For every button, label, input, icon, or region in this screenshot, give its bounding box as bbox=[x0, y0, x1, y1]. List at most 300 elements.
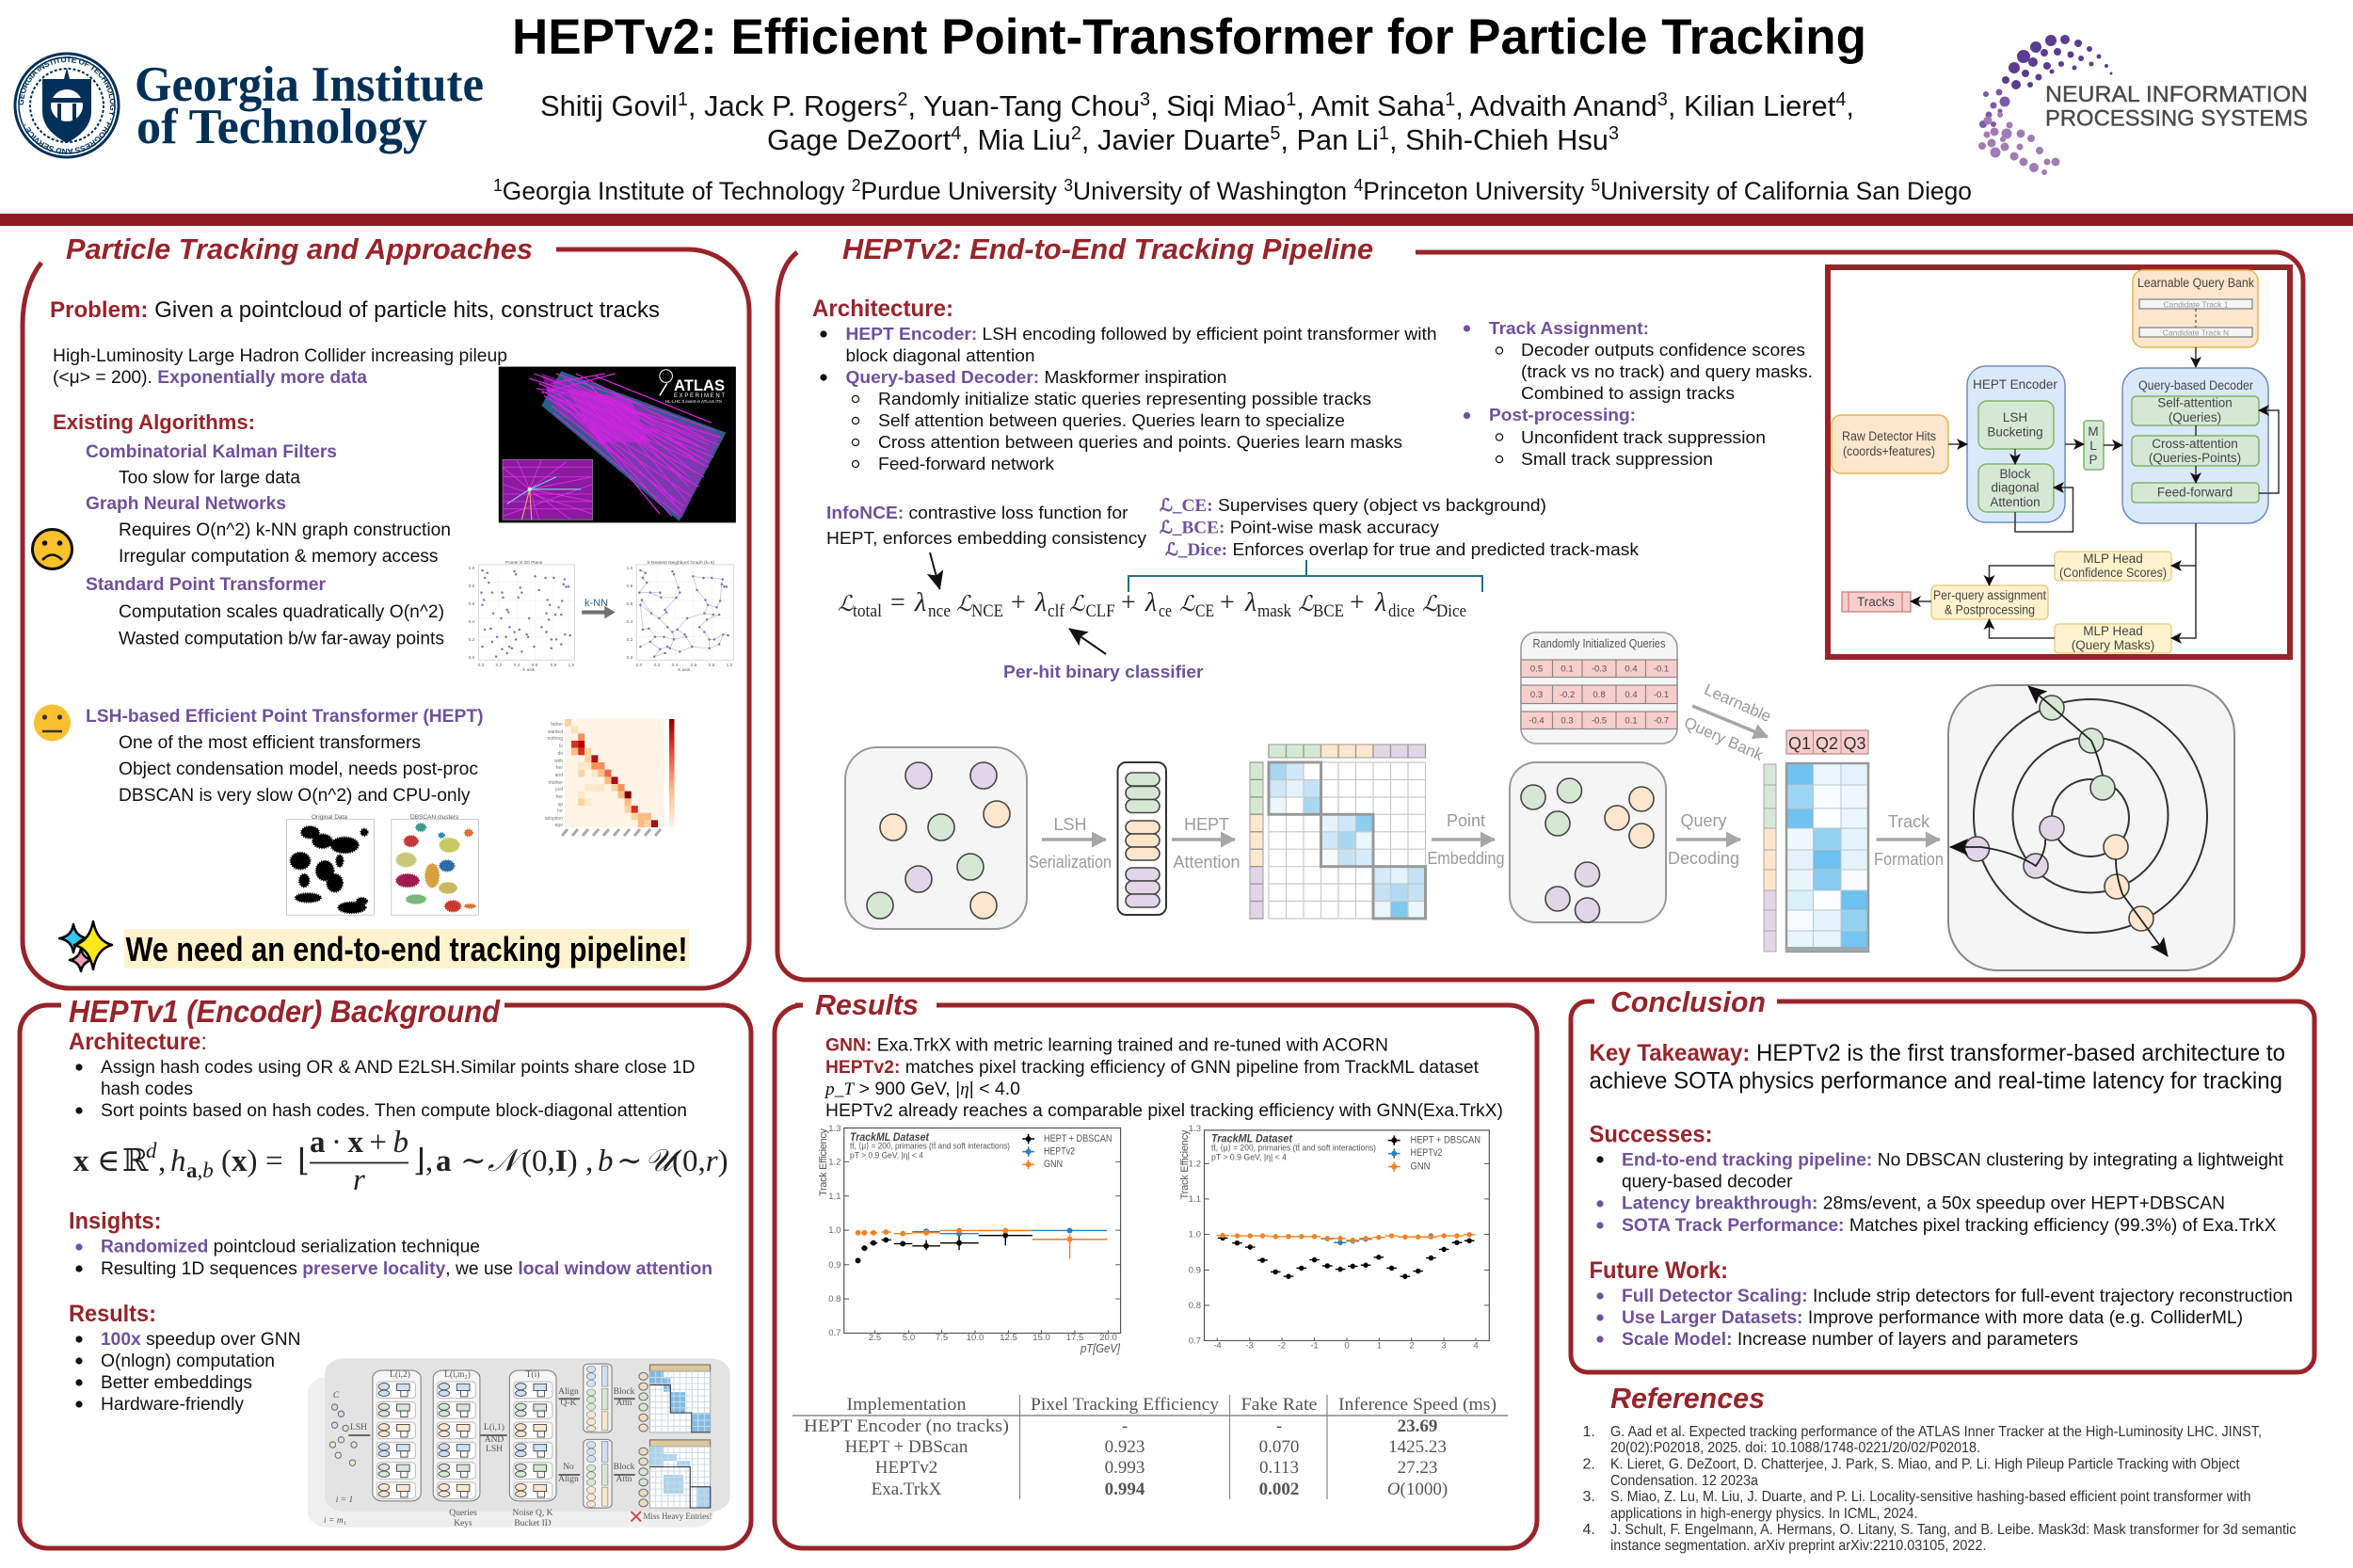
block: tracks bbox=[1842, 592, 1911, 612]
arrow: track formation: Formation bbox=[1874, 850, 1944, 869]
text block: track assignment and post-processing: Combined to assign tracks bbox=[1521, 383, 1735, 403]
panel: End-to-End Tracking Pipeline bbox=[777, 232, 2303, 980]
table: benchmark comparison: Exa.TrkX bbox=[872, 1480, 942, 1499]
diagram: reconstructed tracks bbox=[1948, 685, 2234, 970]
equation: total loss: + bbox=[1121, 588, 1136, 617]
equation: LSH hash function: ⌊ bbox=[297, 1144, 310, 1178]
arrow: LSH serialization: Serialization bbox=[1029, 853, 1112, 872]
chart: efficiency vs pT: 2.5 bbox=[869, 1333, 881, 1343]
title: HEPTv2: Efficient Point-Transformer for Particle Tracking bbox=[512, 9, 1866, 65]
chart: efficiency vs eta: 3 bbox=[1441, 1340, 1447, 1352]
text block: architecture bbox=[69, 1029, 695, 1121]
chart: block-diagonal attention matrix bbox=[1250, 744, 1425, 919]
diagram: HEPT encoder overview: Block bbox=[614, 1463, 635, 1472]
chart: efficiency vs pT: HEPT + DBSCAN bbox=[1044, 1133, 1112, 1144]
chart: k-NN scatter plots: X axis bbox=[522, 667, 536, 673]
chart: k-NN scatter plots: k-Nearest Neighbors Graph (k=5) bbox=[648, 560, 714, 566]
chart: efficiency vs eta: 0.9 bbox=[1189, 1265, 1201, 1276]
block: MLP head masks: MLP Head bbox=[2083, 624, 2143, 638]
equation: LSH hash function: a,b bbox=[186, 1159, 214, 1182]
equation: total loss: ℒ bbox=[1069, 592, 1085, 616]
diagram: architecture flowchart bbox=[1828, 267, 2290, 657]
authors: 1 bbox=[678, 89, 688, 110]
block: HEPT encoder: diagonal bbox=[1991, 480, 2040, 495]
chart: k-NN scatter plots: 0.8 bbox=[709, 663, 715, 668]
equation: total loss: ce bbox=[1159, 601, 1172, 621]
block: query-based decoder: Cross-attention bbox=[2152, 437, 2238, 451]
arrow: HEPT attention: Attention bbox=[1173, 853, 1241, 872]
flowchart arrows bbox=[1911, 347, 2279, 638]
equation: total loss: NCE bbox=[971, 601, 1003, 621]
table: benchmark comparison: 0.002 bbox=[1259, 1480, 1299, 1499]
authors: 2 bbox=[1071, 123, 1081, 144]
chart: attention heatmap: for bbox=[557, 808, 563, 814]
chart: DBSCAN clusters bbox=[286, 814, 478, 915]
chart: query mask matrix: Q3 bbox=[1843, 734, 1866, 753]
table: benchmark comparison: HEPT + DBScan bbox=[845, 1437, 968, 1457]
text block: successes: query-based decoder bbox=[1622, 1173, 1793, 1192]
chart: k-NN scatter plots: 0.2 bbox=[654, 663, 661, 668]
logo wordmark: of Technology bbox=[136, 100, 427, 154]
equation: LSH hash function: h bbox=[170, 1144, 186, 1178]
text block: HEPT bbox=[86, 707, 484, 806]
diagram: HEPT encoder overview: L(i,1) bbox=[484, 1422, 504, 1432]
text block: track assignment and post-processing bbox=[1464, 318, 1813, 469]
table: benchmark comparison: 27.23 bbox=[1398, 1458, 1437, 1478]
diagram: HEPT encoder overview: No bbox=[563, 1463, 574, 1472]
chart: k-NN scatter plots: 1.0 bbox=[627, 566, 633, 571]
diagram: HEPT encoder overview: C bbox=[333, 1391, 340, 1400]
arrow: HEPT attention bbox=[1172, 815, 1241, 872]
arrow: LSH serialization bbox=[1029, 815, 1112, 872]
block: per-query assignment: & Postprocessing bbox=[1945, 602, 2035, 617]
table: benchmark comparison bbox=[792, 1395, 1508, 1499]
block: raw detector hits: Raw Detector Hits bbox=[1842, 429, 1936, 443]
chart: attention heatmap: nothing bbox=[548, 736, 563, 742]
authors: , Jack P. Rogers bbox=[688, 89, 897, 122]
diagram: HEPT encoder overview: Attn bbox=[616, 1475, 632, 1484]
equation: total loss: CE bbox=[1195, 601, 1214, 621]
text block: results: Results: bbox=[69, 1301, 156, 1327]
equation: LSH hash function: ∼ bbox=[460, 1144, 487, 1178]
text block: track assignment and post-processing: Track Assignment: bbox=[1489, 318, 1649, 338]
chart: k-NN scatter plots: Points in 2D Plane bbox=[505, 560, 543, 566]
chart: attention heatmap: her bbox=[556, 765, 563, 771]
chart: efficiency vs eta: tt̄, ⟨μ⟩ = 200, primaries (tt̄ and soft interactions) bbox=[1211, 1143, 1376, 1154]
equation: total loss: + bbox=[1220, 588, 1235, 617]
diagram: HEPT encoder overview: Queries bbox=[449, 1509, 477, 1518]
block: per-query assignment: Per-query assignment bbox=[1933, 588, 2046, 602]
diagram: randomly initialized queries: 0.8 bbox=[1593, 690, 1606, 700]
heading: Conclusion bbox=[1610, 985, 1766, 1018]
chart: efficiency vs eta: -3 bbox=[1245, 1340, 1254, 1352]
authors: , Shih-Chieh Hsu bbox=[1389, 123, 1609, 156]
block: learnable query bank: Candidate Track N bbox=[2163, 328, 2229, 337]
diagram: HEPT encoder overview: Noise Q, K bbox=[512, 1509, 553, 1518]
chart: k-NN scatter plots: 1.0 bbox=[469, 566, 475, 571]
chart: efficiency vs pT: tt̄, ⟨μ⟩ = 200, primaries (tt̄ and soft interactions) bbox=[850, 1141, 1010, 1152]
affiliations: Princeton University bbox=[1363, 177, 1591, 205]
text block: successes: End-to-end tracking pipeline: No DBSCAN clustering by integrating a lightweight bbox=[1622, 1150, 2284, 1171]
authors: , Siqi Miao bbox=[1150, 89, 1286, 122]
heading: HEPTv1 (Encoder) Background bbox=[69, 994, 501, 1029]
equation: total loss: total bbox=[853, 601, 882, 621]
text block: future work: Future Work: bbox=[1589, 1257, 1728, 1284]
table: benchmark comparison: 0.113 bbox=[1259, 1458, 1299, 1478]
bracket: mask losses bbox=[1128, 560, 1482, 592]
equation: LSH hash function: b bbox=[598, 1144, 614, 1178]
diagram: serialized sequence bbox=[1118, 762, 1166, 915]
diagram: HEPT encoder overview: Block bbox=[614, 1387, 635, 1397]
diagram: randomly initialized queries: 0.3 bbox=[1530, 690, 1543, 700]
logo wordmark: Georgia Institute bbox=[135, 57, 484, 112]
text block: architecture: Assign hash codes using OR & AND E2LSH.Similar points share close 1D bbox=[101, 1058, 695, 1078]
chart: efficiency vs pT: 7.5 bbox=[936, 1333, 948, 1343]
diagram: randomly initialized queries: -0.1 bbox=[1654, 664, 1669, 674]
text block: track assignment and post-processing: Post-processing: bbox=[1489, 405, 1636, 424]
authors: , Kilian Lieret bbox=[1668, 89, 1836, 122]
text block: architecture list: Randomly initialize static queries representing possible tracks bbox=[878, 389, 1371, 408]
text block: existing algorithms: Wasted computation b/w far-away points bbox=[119, 629, 444, 649]
panel border bbox=[23, 249, 749, 988]
equation: LSH hash function: , bbox=[585, 1144, 593, 1178]
text block: results summary: HEPTv2: matches pixel tracking efficiency of GNN pipeline from TrackML dataset bbox=[825, 1058, 1480, 1078]
text block: InfoNCE note bbox=[826, 503, 1147, 548]
chart: k-NN scatter plots bbox=[469, 560, 733, 673]
arrow: query decoding: Query bbox=[1680, 811, 1727, 830]
arrow: point embedding: Point bbox=[1447, 811, 1485, 830]
text block: key takeaway: Key Takeaway: HEPTv2 is the first transformer-based architecture to bbox=[1589, 1040, 2285, 1066]
chart: efficiency vs eta: -4 bbox=[1213, 1340, 1222, 1352]
diagram: randomly initialized queries: 0.1 bbox=[1625, 715, 1638, 727]
text block: existing algorithms: Combinatorial Kalman Filters bbox=[86, 442, 337, 462]
chart: k-NN scatter plots: 1.0 bbox=[568, 663, 575, 668]
text block: track assignment and post-processing: (track vs no track) and query masks. bbox=[1521, 361, 1813, 381]
table: benchmark comparison: 0.994 bbox=[1105, 1480, 1145, 1499]
text block: key takeaway bbox=[1589, 1040, 2285, 1094]
text block: reference list: 20(02):P02018, 2025. doi: 10.1088/1748-0221/20/02/P02018. bbox=[1610, 1440, 1980, 1456]
authors: Shitij Govil bbox=[540, 89, 678, 122]
chart: k-NN scatter plots: 0.2 bbox=[627, 637, 633, 643]
block: MLP head masks: (Query Masks) bbox=[2072, 638, 2154, 652]
chart: k-NN scatter plots: 0.6 bbox=[627, 601, 633, 607]
authors bbox=[540, 89, 1854, 156]
chart: efficiency vs eta: 1.0 bbox=[1189, 1229, 1201, 1240]
text block: results summary bbox=[824, 1035, 1503, 1121]
diagram: randomly initialized queries: -0.5 bbox=[1592, 715, 1607, 727]
arrow: to classifier term bbox=[1069, 629, 1106, 654]
equation: total loss: nce bbox=[928, 601, 951, 621]
diagram: HEPT encoder overview: Align bbox=[558, 1475, 579, 1484]
callout: need end-to-end pipeline: We need an end-to-end tracking pipeline! bbox=[126, 930, 687, 968]
text block: results bbox=[69, 1301, 301, 1415]
equation: total loss: clf bbox=[1048, 601, 1065, 621]
diagram: HEPT encoder overview: T(i) bbox=[526, 1369, 539, 1380]
block: tracks: Tracks bbox=[1857, 595, 1895, 609]
chart: attention heatmap: wanted bbox=[548, 729, 563, 735]
diagram: randomly initialized queries: 0.4 bbox=[1625, 664, 1638, 674]
arrow: track formation bbox=[1874, 812, 1944, 869]
equation: LSH hash function: , bbox=[158, 1144, 166, 1178]
equation: LSH hash function: 𝒩 bbox=[488, 1144, 526, 1178]
text block: HL-LHC: (<μ> = 200). Exponentially more data bbox=[53, 367, 367, 388]
block: HEPT encoder: Block bbox=[1999, 467, 2031, 481]
equation: total loss bbox=[838, 588, 1466, 621]
chart: efficiency vs eta: -1 bbox=[1310, 1340, 1319, 1352]
equation: LSH hash function: 𝒰 bbox=[645, 1144, 681, 1178]
ATLAS label bbox=[665, 377, 725, 404]
table: benchmark comparison: Inference Speed (ms) bbox=[1338, 1395, 1497, 1415]
chart: k-NN scatter plots: 0.6 bbox=[691, 663, 697, 668]
block: query-based decoder: Query-based Decoder bbox=[2138, 378, 2253, 392]
logo wordmark bbox=[2045, 82, 2308, 132]
arrow: query decoding bbox=[1668, 811, 1740, 868]
text block: insights: Randomized pointcloud serialization technique bbox=[101, 1237, 480, 1257]
panel: Particle Tracking and Approaches bbox=[23, 232, 749, 988]
chart: efficiency vs pT: 5.0 bbox=[903, 1333, 915, 1343]
chart: attention heatmap: with bbox=[554, 759, 563, 764]
chart: k-NN scatter plots: 0.8 bbox=[469, 584, 475, 589]
text block: architecture: Architecture: bbox=[69, 1029, 207, 1055]
chart: efficiency vs eta: 0.7 bbox=[1189, 1336, 1201, 1346]
table: benchmark comparison: - bbox=[1276, 1416, 1282, 1436]
table: benchmark comparison: 23.69 bbox=[1398, 1416, 1437, 1436]
arrow: to InfoNCE term bbox=[930, 552, 939, 589]
text block: reference list: J. Schult, F. Engelmann, A. Hermans, O. Litany, S. Tang, and B. Leibe. Mask3d: Mask transformer for 3d semantic bbox=[1610, 1522, 2297, 1538]
chart: k-NN scatter plots: 0.8 bbox=[551, 663, 557, 668]
chart: efficiency vs pT: 0.7 bbox=[828, 1328, 841, 1338]
diagram: HEPT encoder overview: Q-K bbox=[561, 1399, 577, 1408]
diagram: randomly initialized queries: -0.1 bbox=[1654, 690, 1669, 700]
chart: DBSCAN clusters: Original Data bbox=[312, 814, 347, 821]
icon: neural dots bbox=[1978, 35, 2112, 175]
equation: LSH hash function: ⌋, bbox=[413, 1144, 433, 1178]
chart: efficiency vs pT: 1.2 bbox=[828, 1158, 841, 1167]
text block: reference list bbox=[1583, 1424, 2297, 1554]
text block: loss terms: ℒ_Dice: Enforces overlap for true and predicted track-mask bbox=[1165, 539, 1640, 560]
text block: results summary: HEPTv2 already reaches a comparable pixel tracking efficiency with GNN(Exa.TrkX) bbox=[825, 1101, 1503, 1121]
equation: total loss: = bbox=[890, 588, 905, 617]
text block: existing algorithms: Graph Neural Networks bbox=[86, 494, 286, 514]
text block: results: 100x speedup over GNN bbox=[101, 1330, 301, 1350]
equation: total loss: λ bbox=[1034, 588, 1047, 617]
authors: 4 bbox=[1835, 89, 1846, 110]
affiliations: 1 bbox=[493, 176, 503, 195]
chart: efficiency vs eta: 2 bbox=[1409, 1340, 1415, 1352]
ATLAS label: EXPERIMENT bbox=[674, 393, 725, 399]
chart: efficiency vs eta: 1.1 bbox=[1189, 1194, 1201, 1205]
equation: total loss: ℒ bbox=[1179, 592, 1195, 616]
equation: LSH hash function: ℝ bbox=[122, 1144, 149, 1178]
text block: existing algorithms: Requires O(n^2) k-NN graph construction bbox=[119, 520, 451, 540]
table: benchmark comparison: 0.993 bbox=[1105, 1458, 1144, 1478]
chart: attention heatmap: her bbox=[556, 794, 563, 800]
text block: successes: Latency breakthrough: 28ms/event, a 50x speedup over HEPT+DBSCAN bbox=[1622, 1193, 2225, 1214]
equation: total loss: λ bbox=[1144, 588, 1157, 617]
block: HEPT encoder: LSH bbox=[2003, 410, 2027, 424]
text block: InfoNCE note: InfoNCE: contrastive loss function for bbox=[826, 503, 1128, 522]
text block: HL-LHC: High-Luminosity Large Hadron Collider increasing pileup bbox=[53, 345, 507, 366]
chart: efficiency vs eta: pT > 0.9 GeV, |η| < 4 bbox=[1211, 1152, 1287, 1163]
diagram: point cloud input bbox=[845, 747, 1027, 929]
chart: attention heatmap: mother bbox=[548, 780, 563, 786]
diagram: HEPT encoder overview: Miss Heavy Entries! bbox=[644, 1512, 712, 1522]
heading: Results bbox=[815, 988, 919, 1021]
table: benchmark comparison: 0.923 bbox=[1105, 1437, 1144, 1457]
equation: total loss: λ bbox=[1244, 588, 1257, 617]
chart: efficiency vs pT: 12.5 bbox=[1000, 1333, 1017, 1343]
block: learnable query bank: Learnable Query Bank bbox=[2137, 276, 2254, 290]
text block: architecture list: Architecture: bbox=[812, 296, 953, 322]
affiliations: 3 bbox=[1064, 176, 1073, 195]
chart: efficiency vs pT: Track Efficiency bbox=[818, 1128, 829, 1196]
block: MLP: M bbox=[2088, 424, 2099, 439]
chart: efficiency vs eta: HEPTv2 bbox=[1410, 1147, 1442, 1159]
authors: , Pan Li bbox=[1280, 123, 1379, 156]
chart: k-NN scatter plots: 0.8 bbox=[627, 584, 633, 589]
authors: 1 bbox=[1379, 123, 1389, 144]
text block: architecture list bbox=[812, 296, 1436, 473]
chart: efficiency vs pT: pT > 0.9 GeV, |η| < 4 bbox=[850, 1150, 923, 1161]
block: HEPT encoder: Attention bbox=[1990, 495, 2041, 509]
text block: track assignment and post-processing: Decoder outputs confidence scores bbox=[1521, 340, 1805, 360]
equation: LSH hash function: r bbox=[353, 1163, 365, 1197]
equation: LSH hash function: a · x + b bbox=[310, 1126, 408, 1160]
panel: HEPTv1 Encoder Background bbox=[20, 994, 751, 1548]
text block: successes: Successes: bbox=[1589, 1122, 1713, 1148]
chart: query mask matrix: Q2 bbox=[1816, 734, 1838, 753]
chart: attention heatmap bbox=[545, 719, 674, 836]
affiliations: University of California San Diego bbox=[1600, 177, 1972, 205]
text block: existing algorithms bbox=[53, 410, 451, 649]
panel border bbox=[20, 1005, 751, 1548]
text block: insights bbox=[69, 1208, 712, 1279]
heading: Particle Tracking and Approaches bbox=[66, 232, 533, 265]
flowchart frame bbox=[1828, 267, 2290, 657]
chart: k-NN scatter plots: 0.0 bbox=[469, 655, 475, 661]
diagram: randomly initialized queries: -0.3 bbox=[1592, 664, 1607, 674]
diagram: HEPT encoder overview: Attn bbox=[616, 1399, 632, 1408]
equation: total loss: mask bbox=[1257, 601, 1291, 621]
text block: existing algorithms: Existing Algorithms: bbox=[53, 410, 255, 434]
text block: results summary: p_T > 900 GeV, |η| < 4.0 bbox=[824, 1080, 1020, 1099]
equation: total loss: ℒ bbox=[838, 592, 854, 616]
diagram: randomly initialized queries: 0.4 bbox=[1625, 690, 1638, 700]
equation: LSH hash function: (0,I) bbox=[521, 1144, 578, 1178]
icon: GT seal: GEORGIA INSTITUTE OF TECHNOLOGY · PROGRESS AND SERVICE · bbox=[18, 56, 116, 154]
affiliations: Georgia Institute of Technology bbox=[503, 177, 852, 205]
chart: k-NN scatter plots: 0.6 bbox=[532, 663, 538, 668]
text block: reference list: K. Lieret, G. DeZoort, D. Chatterjee, J. Park, S. Miao, and P. Li. High Pileup Particle Tracking with Object bbox=[1610, 1457, 2240, 1472]
logo: NeurIPS bbox=[1978, 35, 2308, 175]
chart: efficiency vs pT: 1.1 bbox=[828, 1192, 841, 1202]
block: learnable query bank bbox=[2133, 270, 2258, 347]
equation: LSH hash function: ∼ bbox=[616, 1144, 643, 1178]
text block: existing algorithms: Irregular computation & memory access bbox=[119, 547, 438, 567]
block: HEPT encoder bbox=[1967, 366, 2065, 522]
affiliations: 2 bbox=[852, 176, 860, 195]
authors: , Javier Duarte bbox=[1081, 123, 1270, 156]
arrow: HEPT attention: HEPT bbox=[1184, 815, 1229, 834]
equation: total loss: dice bbox=[1388, 601, 1415, 621]
diagram: randomly initialized queries: -0.7 bbox=[1654, 715, 1669, 727]
text block: track assignment and post-processing: Unconfident track suppression bbox=[1521, 427, 1766, 447]
authors: 3 bbox=[1140, 89, 1150, 110]
equation: LSH hash function bbox=[73, 1126, 728, 1197]
banner bar bbox=[0, 214, 2353, 226]
chart: attention heatmap: up bbox=[557, 802, 563, 808]
text block: reference list: 2. bbox=[1583, 1457, 1595, 1472]
diagram: randomly initialized queries bbox=[1521, 632, 1677, 744]
chart: efficiency vs eta: GNN bbox=[1410, 1161, 1431, 1173]
chart: efficiency vs pT: 1.0 bbox=[828, 1225, 841, 1236]
chart: attention heatmap: and bbox=[555, 773, 563, 778]
equation: total loss: λ bbox=[1374, 588, 1386, 617]
equation: LSH hash function: (x) bbox=[221, 1144, 258, 1178]
diagram: HEPT encoder overview bbox=[308, 1358, 730, 1528]
icon: neutral face bbox=[34, 704, 71, 742]
chart: efficiency vs eta: -2 bbox=[1278, 1340, 1286, 1352]
text block: results: Hardware-friendly bbox=[101, 1395, 244, 1415]
arrow: learnable query bank: Learnable bbox=[1702, 680, 1774, 726]
chart: k-NN scatter plots: 0.0 bbox=[636, 663, 643, 668]
chart: efficiency vs pT: 10.0 bbox=[967, 1333, 984, 1343]
chart: efficiency vs eta: 1.3 bbox=[1189, 1124, 1201, 1134]
text block: future work: Full Detector Scaling: Include strip detectors for full-event trajectory reconstruction bbox=[1622, 1287, 2293, 1306]
table: benchmark comparison: O(1000) bbox=[1387, 1480, 1448, 1499]
block: MLP head confidence: MLP Head bbox=[2083, 552, 2143, 566]
heading: HEPTv2: End-to-End Tracking Pipeline bbox=[842, 232, 1373, 265]
authors: Gage DeZoort bbox=[767, 123, 952, 156]
logo wordmark: NEURAL INFORMATION bbox=[2045, 82, 2308, 107]
equation: LSH hash function: = bbox=[265, 1144, 283, 1178]
table: benchmark comparison: Implementation bbox=[847, 1395, 967, 1415]
chart: efficiency vs eta: 0.8 bbox=[1189, 1301, 1201, 1311]
chart: efficiency vs pT: pT[GeV] bbox=[1080, 1341, 1120, 1355]
references bbox=[1583, 1382, 2297, 1554]
text block: architecture: Sort points based on hash codes. Then compute block-diagonal attention bbox=[101, 1101, 687, 1121]
text block: reference list: instance segmentation. arXiv preprint arXiv:2210.03105, 2022. bbox=[1610, 1538, 1986, 1554]
text block: problem: Problem: Given a pointcloud of particle hits, construct tracks bbox=[50, 297, 660, 323]
diagram: HEPT encoder overview: Keys bbox=[454, 1519, 472, 1528]
equation: total loss: + bbox=[1011, 588, 1026, 617]
text block: loss terms: ℒ_BCE: Point-wise mask accuracy bbox=[1160, 518, 1440, 538]
block: raw detector hits: (coords+features) bbox=[1843, 444, 1935, 458]
diagram: randomly initialized queries: 0.5 bbox=[1530, 664, 1543, 674]
diagram: HEPT encoder overview: i = 1 bbox=[336, 1496, 353, 1505]
chart: efficiency vs eta: 1.2 bbox=[1189, 1160, 1201, 1169]
block: query-based decoder: Feed-forward bbox=[2157, 486, 2233, 499]
chart: DBSCAN clusters: DBSCAN clusters bbox=[410, 814, 459, 821]
text block: track assignment and post-processing: Small track suppression bbox=[1521, 449, 1713, 469]
icon: sad face bbox=[32, 529, 72, 568]
arrow: track formation: Track bbox=[1888, 812, 1930, 831]
chart: k-NN scatter plots: 1.0 bbox=[727, 663, 733, 668]
authors: , Mia Liu bbox=[961, 123, 1071, 156]
block: learnable query bank: Candidate Track 1 bbox=[2164, 299, 2229, 309]
text block: results: Better embeddings bbox=[101, 1373, 252, 1393]
text block: future work bbox=[1589, 1257, 2293, 1350]
chart: attention heatmap: age bbox=[555, 823, 563, 828]
block: MLP head confidence bbox=[2055, 552, 2171, 581]
chart: efficiency vs eta: HEPT + DBSCAN bbox=[1410, 1135, 1481, 1146]
chart: efficiency vs pT: 15.0 bbox=[1032, 1333, 1050, 1343]
chart: efficiency vs eta: Track Efficiency bbox=[1179, 1129, 1191, 1199]
text block: existing algorithms: Standard Point Transformer bbox=[86, 575, 327, 595]
affiliations: 5 bbox=[1591, 176, 1600, 195]
equation: LSH hash function: d bbox=[146, 1139, 157, 1162]
table: benchmark comparison: HEPTv2 bbox=[875, 1458, 937, 1478]
